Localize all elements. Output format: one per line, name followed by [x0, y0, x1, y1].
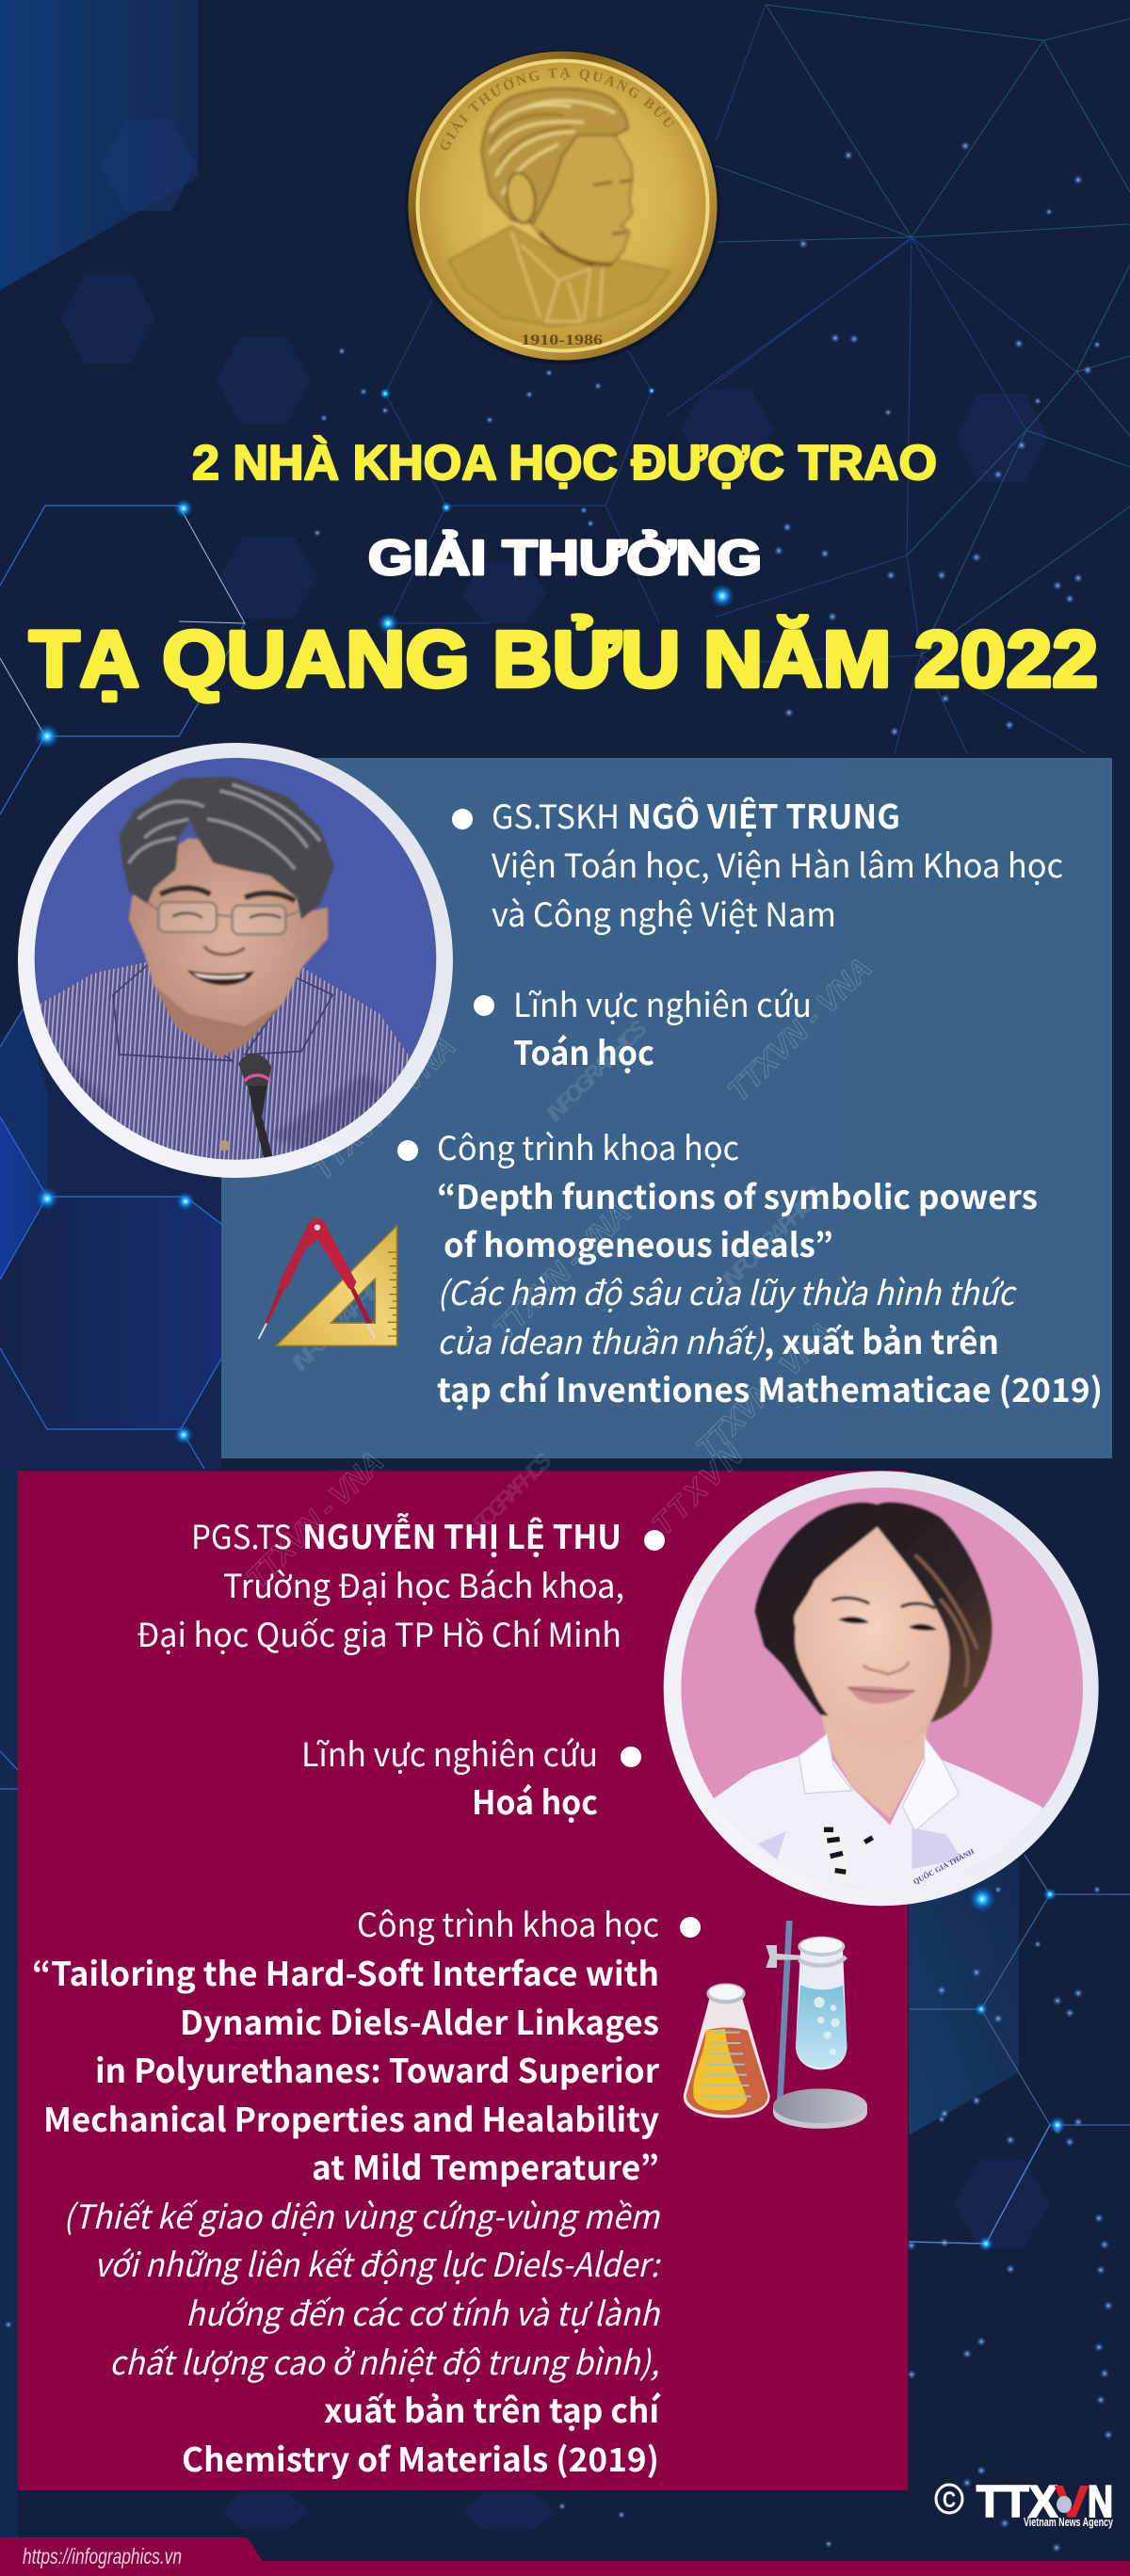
name and affiliation: Trường Đại học Bách khoa, — [223, 1560, 624, 1608]
panel: Ngô Việt Trung: TTXVN - VNA — [721, 951, 879, 1108]
scientific work: tạp chí Inventiones Mathematicae (2019) — [437, 1364, 1103, 1412]
scientific work: Dynamic Diels-Alder Linkages — [180, 1997, 659, 2045]
research field: Lĩnh vực nghiên cứu — [513, 979, 812, 1027]
blouse — [835, 1883, 836, 1884]
glasses — [158, 902, 285, 934]
microphone — [238, 1054, 271, 1089]
scientific work: “Depth functions of symbolic powers — [437, 1171, 1038, 1219]
research field — [474, 979, 812, 1075]
network lines — [716, 5, 1130, 655]
neck — [821, 1712, 928, 1819]
panel: Nguyễn Thị Lệ Thu: TTXVN — [645, 1437, 750, 1541]
research field: Lĩnh vực nghiên cứu — [301, 1729, 598, 1777]
scientific work: với những liên kết động lực Diels-Alder: — [94, 2239, 661, 2287]
name and affiliation: Viện Toán học, Viện Hàn lâm Khoa học — [492, 840, 1063, 888]
medal inscription: GIẢI THƯỞNG TẠ QUANG BỬU — [441, 68, 674, 151]
scientific work: “Tailoring the Hard-Soft Interface with — [32, 1948, 659, 1996]
collar — [113, 963, 332, 1061]
scientific work: Công trình khoa học — [357, 1899, 659, 1947]
eyebrows — [831, 1598, 935, 1608]
logo: TTXVN: C — [943, 2487, 956, 2513]
name and affiliation: và Công nghệ Việt Nam — [492, 889, 836, 937]
portrait: Nguyễn Thị Lệ Thu — [664, 1471, 1099, 1913]
name and affiliation — [137, 1511, 665, 1657]
shirt — [40, 962, 411, 1160]
scientific work — [397, 1122, 1103, 1412]
title — [29, 436, 1098, 703]
flask — [685, 1983, 769, 2117]
scientific work: xuất bản trên tạp chí — [324, 2385, 661, 2433]
medal — [405, 50, 719, 364]
logo: TTXVN — [936, 2476, 1114, 2529]
scientific work: of homogeneous ideals” — [444, 1219, 833, 1267]
title line 3: TẠ QUANG BỬU NĂM 2022 — [29, 615, 1098, 703]
lips — [848, 1686, 915, 1703]
scientific work: Mechanical Properties and Healability — [43, 2094, 659, 2142]
scientific work — [32, 1899, 701, 2482]
hair — [120, 777, 334, 920]
panel: Ngô Việt Trung: TTXVN - VNA — [689, 1314, 840, 1465]
hair strands — [915, 1555, 977, 1687]
icon: compass and set square — [259, 1218, 397, 1345]
panel: Nguyễn Thị Lệ Thu — [18, 1437, 908, 2490]
lab coat — [714, 1756, 1043, 1889]
icon: flask and test tube — [685, 1921, 867, 2129]
scientific work: , xuất bản trên — [764, 1316, 999, 1364]
badge text: QUỐC GIA THÀNH — [912, 1846, 977, 1886]
scientific work: in Polyurethanes: Toward Superior — [95, 2045, 660, 2093]
scientific work: Công trình khoa học — [437, 1122, 739, 1170]
panel: Nguyễn Thị Lệ Thu: INFOGRAPHICS — [460, 1448, 557, 1546]
shirt shadows — [63, 1057, 389, 1158]
medal portrait — [449, 89, 670, 327]
panel: Ngô Việt Trung — [221, 758, 1112, 1465]
hair back — [755, 1503, 992, 1725]
scientific work: hướng đến các cơ tính và tự lành — [186, 2288, 661, 2336]
collar — [799, 1734, 959, 1831]
research field — [301, 1729, 641, 1825]
name and affiliation: GS.TSKH — [492, 791, 620, 839]
panel: Ngô Việt Trung: TTXVN - VNA — [305, 1029, 462, 1186]
button — [219, 1140, 230, 1151]
logo: TTXVN: N — [1088, 2476, 1113, 2526]
title line 2: GIẢI THƯỞNG — [368, 530, 762, 586]
scientific work: (Các hàm độ sâu của lũy thừa hình thức — [437, 1267, 1017, 1315]
glowing nodes — [35, 387, 1066, 2251]
research field: Toán học — [513, 1027, 654, 1075]
stand base — [773, 2088, 867, 2129]
face — [794, 1527, 949, 1748]
name and affiliation: NGÔ VIỆT TRUNG — [627, 791, 900, 839]
scientific work: của idean thuần nhất) — [437, 1316, 766, 1364]
name and affiliation: Đại học Quốc gia TP Hồ Chí Minh — [137, 1609, 622, 1657]
name and affiliation: NGUYỄN THỊ LỆ THU — [302, 1511, 622, 1559]
footer bar — [0, 2537, 1130, 2576]
portrait: Ngô Việt Trung — [18, 743, 459, 1183]
panel: Nguyễn Thị Lệ Thu: TTXVN - VNA — [239, 1444, 390, 1595]
research field: Hoá học — [472, 1777, 598, 1825]
woman head — [755, 1503, 992, 1819]
medal years: 1910-1986 — [521, 332, 603, 348]
panel: Ngô Việt Trung: INFOGRAPHICS — [287, 1265, 398, 1377]
eyebrows and eyes — [160, 888, 295, 901]
scientific work: at Mild Temperature” — [312, 2142, 659, 2190]
nose and mouth — [204, 946, 245, 955]
name and affiliation: PGS.TS — [191, 1511, 292, 1559]
head — [120, 777, 334, 1057]
scientific work: Chemistry of Materials (2019) — [182, 2434, 659, 2482]
panel: Ngô Việt Trung: INFOGRAPHICS — [718, 1183, 829, 1294]
source url: https://infographics.vn — [23, 2544, 182, 2568]
logo: TTXVN: V — [1055, 2476, 1090, 2526]
panel: Ngô Việt Trung: TTXVN - VNA — [486, 1196, 637, 1346]
panel: Ngô Việt Trung: INFOGRAPHICS — [541, 1016, 653, 1127]
title line 1: 2 NHÀ KHOA HỌC ĐƯỢC TRAO — [192, 436, 937, 491]
name and affiliation — [452, 791, 1063, 937]
nose — [864, 1662, 909, 1674]
logo: TTXVN: TTX — [977, 2476, 1057, 2526]
scientific work: chất lượng cao ở nhiệt độ trung bình), — [109, 2337, 659, 2385]
eyes — [838, 1617, 937, 1631]
scientific work: (Thiết kế giao diện vùng cứng-vùng mềm — [63, 2191, 661, 2239]
